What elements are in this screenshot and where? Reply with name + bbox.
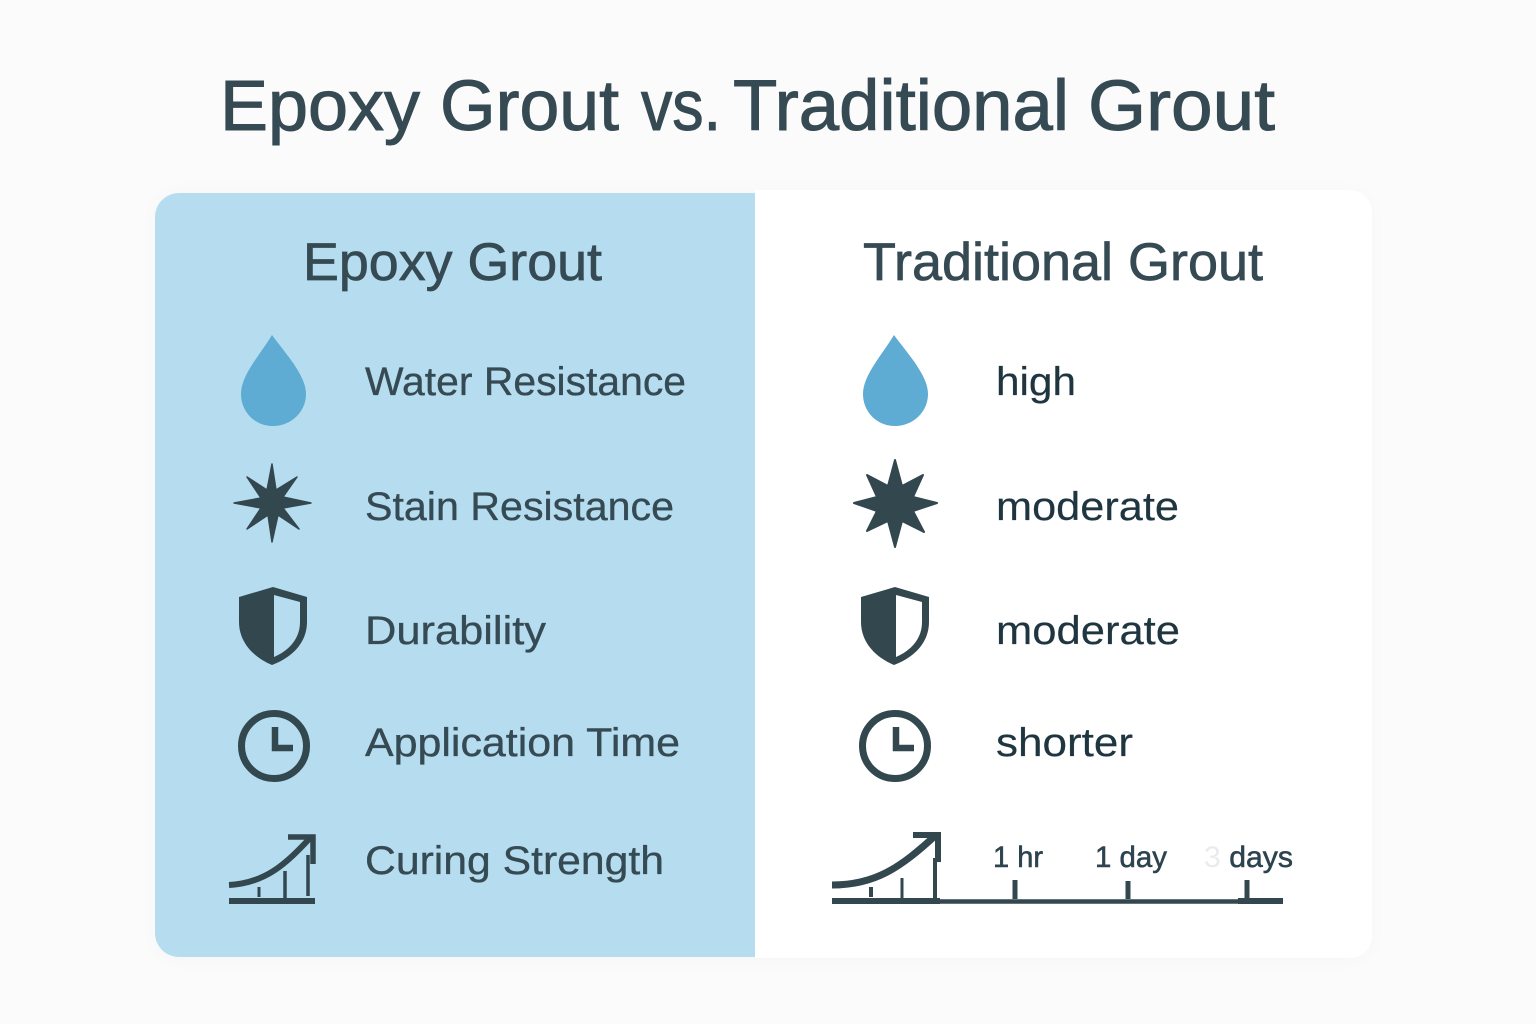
title: Grout	[440, 67, 619, 146]
value: durability moderate: moderate	[996, 609, 1180, 653]
title: Traditional	[733, 67, 1069, 146]
title: Epoxy	[220, 67, 420, 146]
panel: epoxy grout	[155, 193, 755, 957]
label: curing strength: Curing Strength	[365, 839, 664, 883]
tick label: 1 hr: 1 hr	[993, 841, 1043, 874]
icon: star	[854, 460, 937, 547]
comparison card	[155, 190, 1372, 960]
icon: water drop	[241, 335, 306, 426]
value: high: high	[996, 360, 1076, 404]
icon: curing curve	[229, 837, 315, 901]
label: stain resistance: Stain Resistance	[365, 485, 674, 529]
title	[220, 67, 1275, 146]
tick label: 3 days: 3 days	[1204, 841, 1293, 874]
icon: shield	[861, 587, 929, 665]
icon: star	[234, 464, 311, 542]
value: shorter: shorter	[996, 721, 1133, 765]
value: stain moderate: moderate	[996, 485, 1179, 529]
icon: clock	[242, 714, 306, 778]
tick label: 1 day: 1 day	[1095, 841, 1167, 874]
icon: clock	[862, 714, 928, 778]
panel: traditional grout	[832, 233, 1293, 902]
title: Grout	[1088, 67, 1275, 146]
heading: epoxy grout: Epoxy Grout	[303, 233, 602, 292]
icon: shield	[239, 587, 307, 665]
label: water resistance: Water Resistance	[365, 360, 686, 404]
label: durability: Durability	[365, 609, 546, 653]
title: vs.	[641, 67, 721, 146]
icon: water drop	[863, 335, 928, 426]
chart: curing timeline	[832, 835, 1293, 902]
label: application time: Application Time	[365, 721, 680, 765]
heading: traditional grout: Traditional Grout	[863, 233, 1263, 292]
